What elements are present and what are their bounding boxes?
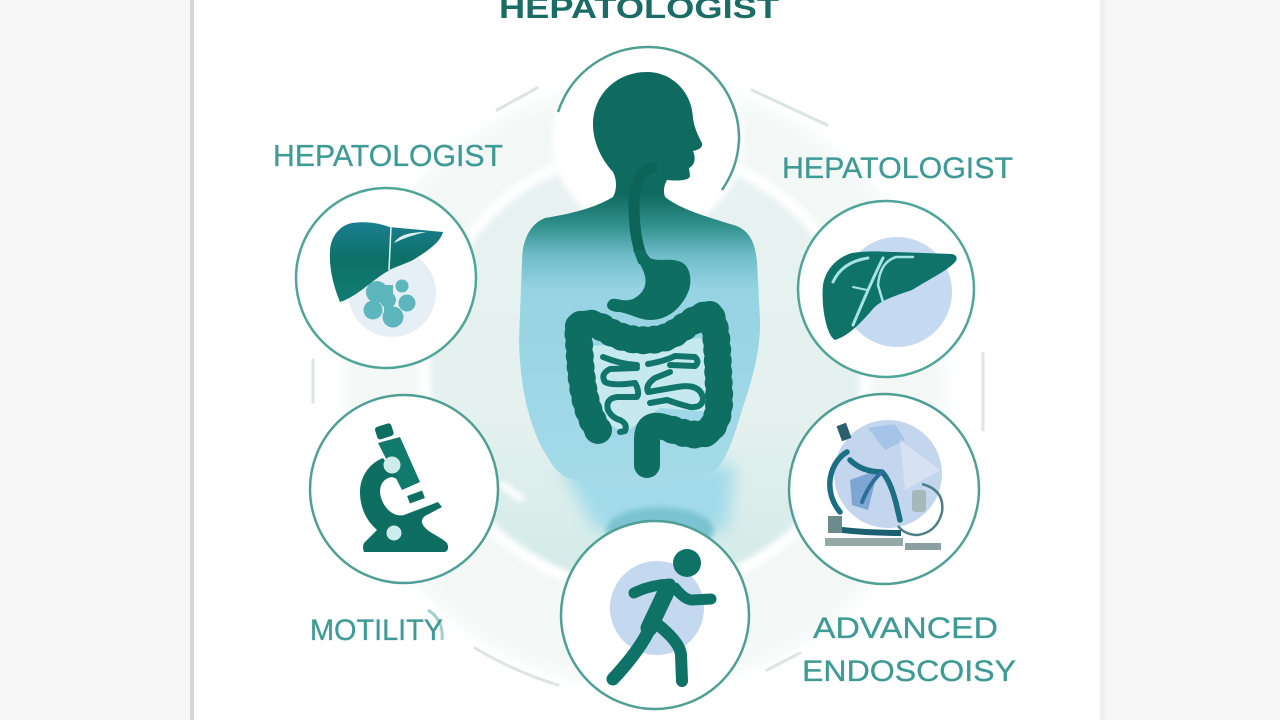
objective <box>407 491 425 503</box>
label: top left: HEPATOLOGIST <box>273 138 503 173</box>
blue disc <box>834 420 942 528</box>
eyepiece <box>837 423 851 441</box>
label: motility: MOTILITY <box>310 614 443 647</box>
label: advanced endoscopy <box>802 612 1016 688</box>
inner abdomen <box>592 338 714 432</box>
icon circle: microscope <box>310 395 498 583</box>
card shadow <box>190 0 194 720</box>
head <box>673 549 701 577</box>
esophagus <box>634 167 657 262</box>
pale disc <box>348 249 436 337</box>
liver highlight <box>394 232 426 243</box>
icon circle: liver <box>798 201 974 377</box>
head halo arc <box>558 47 739 190</box>
body silhouette <box>519 72 760 488</box>
arm and base <box>360 458 448 552</box>
human figure with digestive system <box>519 72 760 488</box>
tube <box>378 437 420 490</box>
teal arc near motility label <box>428 610 442 640</box>
handle <box>912 490 926 512</box>
small intestine <box>603 356 703 432</box>
right card edge <box>1100 0 1105 720</box>
decorative outer ring arcs <box>313 88 983 685</box>
eyepiece <box>374 423 394 440</box>
liver veins <box>833 257 913 325</box>
cable <box>898 484 942 535</box>
liver divider <box>389 227 391 270</box>
fat cells <box>364 280 416 328</box>
background halo shapes <box>348 103 942 674</box>
icon circle: fatty liver <box>296 188 476 368</box>
icon circle: walking person <box>561 521 749 709</box>
liver <box>330 222 443 302</box>
liver shape <box>823 251 957 340</box>
joint block <box>828 516 842 533</box>
white poster card <box>194 0 1100 720</box>
blue disc <box>610 561 704 655</box>
label: advanced endoscopy: ENDOSCOISY <box>802 655 1016 688</box>
stomach <box>607 250 690 320</box>
limbs <box>613 584 711 681</box>
pale blue disc <box>842 237 952 347</box>
holes <box>384 456 400 474</box>
arm base <box>842 527 901 536</box>
icon circle: endoscopy <box>789 394 979 584</box>
label: top right: HEPATOLOGIST <box>782 152 1013 185</box>
scope stand <box>830 452 900 520</box>
label: advanced endoscopy: ADVANCED <box>813 612 998 645</box>
colon <box>578 314 719 465</box>
base plates <box>825 538 903 546</box>
